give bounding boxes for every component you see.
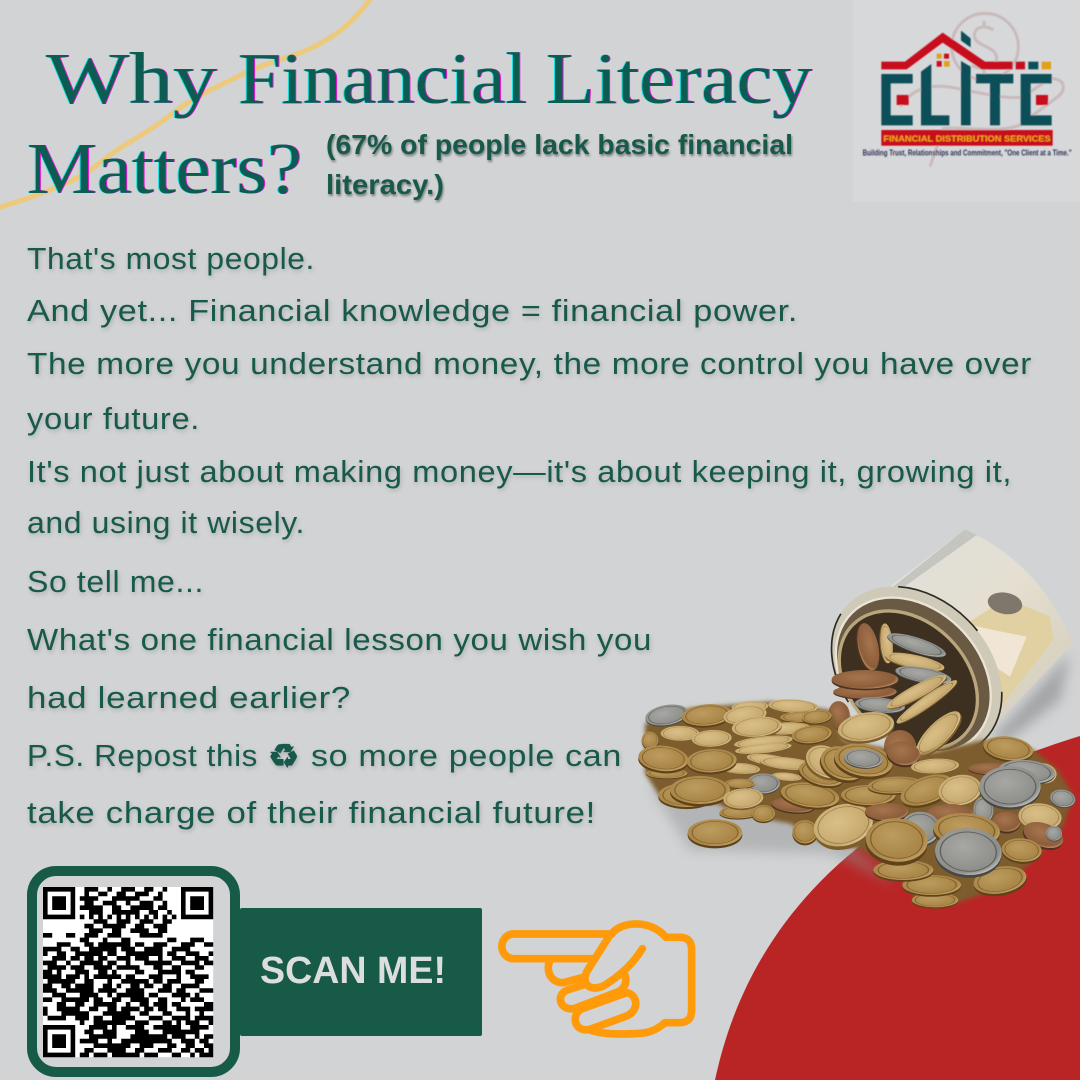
body text: That's most people. bbox=[27, 241, 315, 276]
body text: ♻ bbox=[268, 737, 300, 775]
scan me button: SCAN ME! bbox=[260, 950, 446, 992]
yellow decorative curve bbox=[0, 0, 371, 208]
body text: So tell me... bbox=[27, 564, 204, 599]
logo: Elite Financial Distribution Services bbox=[853, 0, 1080, 202]
scan me button bbox=[240, 908, 482, 1036]
subtitle statistic: literacy.) bbox=[326, 169, 444, 200]
icon: pointing hand bbox=[502, 924, 692, 1034]
title: Why bbox=[46, 38, 218, 119]
red corner shape bbox=[715, 736, 1080, 1080]
jar mouth bbox=[797, 552, 1036, 791]
pile shadow bbox=[650, 773, 897, 887]
coin pile bbox=[637, 698, 1077, 909]
body text: And yet... Financial knowledge = financial power. bbox=[27, 293, 798, 328]
jar shadow bbox=[993, 653, 1070, 747]
coin jar photo bbox=[637, 529, 1077, 909]
body text: had learned earlier? bbox=[27, 680, 351, 715]
body text: so more people can bbox=[311, 738, 622, 773]
banner bbox=[881, 130, 1053, 146]
jar body bbox=[863, 529, 1073, 733]
body text: P.S. Repost this bbox=[27, 738, 258, 773]
logo: Elite Financial Distribution Services: FINANCIAL DISTRIBUTION SERVICES bbox=[883, 133, 1051, 143]
body text bbox=[27, 241, 1032, 830]
title: Literacy bbox=[546, 38, 813, 119]
QR code frame bbox=[32, 871, 235, 1072]
body text: and using it wisely. bbox=[27, 505, 305, 540]
body text: take charge of their financial future! bbox=[27, 795, 596, 830]
body text: your future. bbox=[27, 401, 200, 436]
roof bbox=[881, 33, 1013, 69]
watermark: dollar coin and hand bbox=[900, 13, 1063, 167]
coins inside jar bbox=[852, 621, 883, 673]
body text: The more you understand money, the more control you have over bbox=[27, 346, 1032, 381]
title: Financial bbox=[238, 38, 527, 119]
title bbox=[27, 38, 813, 209]
subtitle statistic: (67% of people lack basic financial bbox=[326, 129, 793, 160]
letters ELITE bbox=[881, 31, 1052, 125]
subtitle statistic bbox=[326, 129, 793, 200]
title: Matters? bbox=[27, 128, 302, 209]
coin pile backing bbox=[645, 702, 1073, 903]
body text: It's not just about making money—it's about keeping it, growing it, bbox=[27, 454, 1012, 489]
body text: What's one financial lesson you wish you bbox=[27, 622, 652, 657]
QR code bbox=[43, 887, 213, 1057]
